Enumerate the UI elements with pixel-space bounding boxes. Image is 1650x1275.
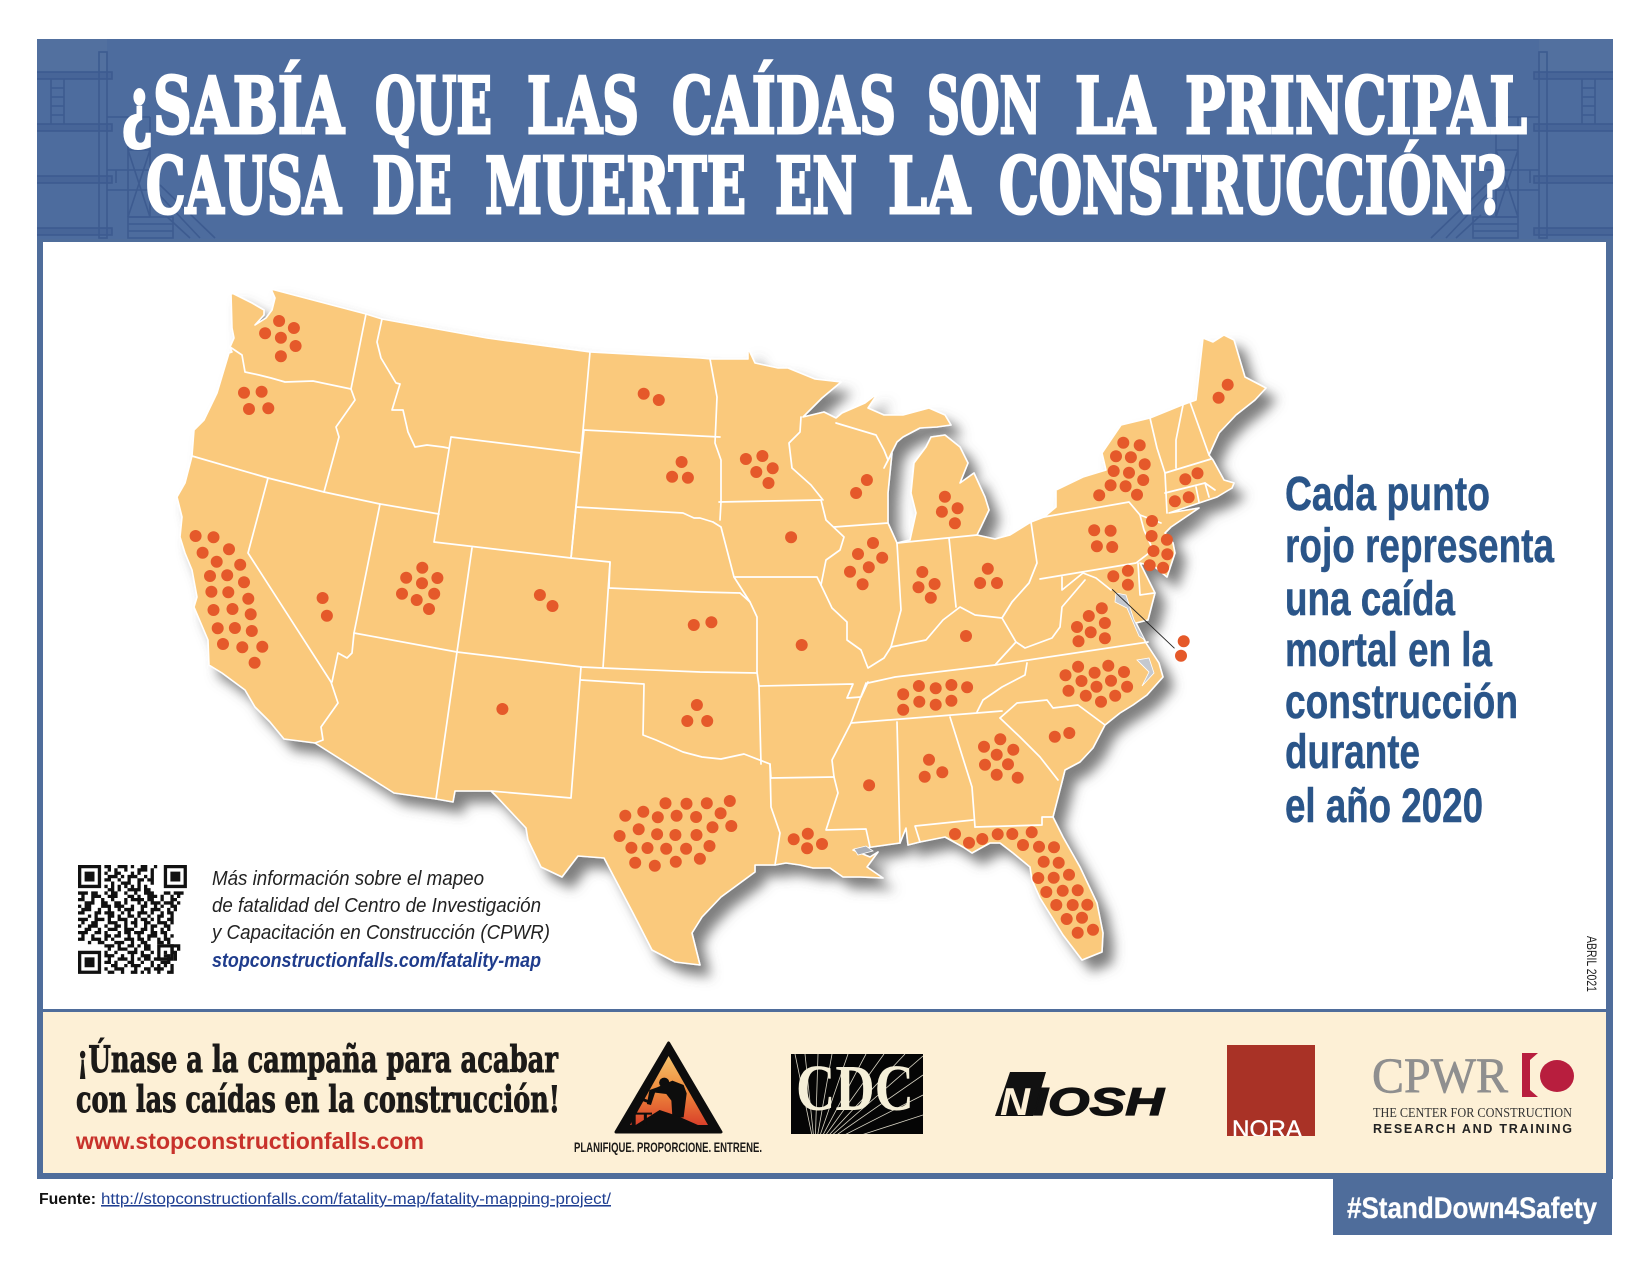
CPWR logo: CPWR — [1372, 1047, 1509, 1103]
map caption: rojo representa — [1285, 520, 1554, 573]
hashtag badge — [1333, 1179, 1612, 1235]
Connecticut dots — [1169, 491, 1195, 507]
more information text: stopconstructionfalls.com/fatality-map — [212, 950, 541, 972]
Washington dots — [259, 315, 302, 362]
campaign heading: ¡Únase a la campaña para acabar — [77, 1039, 559, 1081]
NIOSH logo: IOSH — [1033, 1081, 1165, 1124]
New Jersey dots — [1144, 515, 1173, 574]
map caption: el año 2020 — [1285, 780, 1483, 833]
Georgia dots — [978, 733, 1024, 784]
CPWR logo: THE CENTER FOR CONSTRUCTION — [1373, 1106, 1572, 1121]
title: DE — [372, 141, 452, 232]
logo slogan: PLANIFIQUE. PROPORCIONE. ENTRENE. — [574, 1139, 762, 1155]
Washington DC dots — [1175, 635, 1190, 662]
Washington DC leader line — [1112, 589, 1174, 648]
California dots — [190, 530, 268, 669]
Texas dots — [614, 795, 737, 872]
title: CAÍDAS — [672, 60, 896, 152]
Kansas dots — [688, 616, 717, 631]
more information text: y Capacitación en Construcción (CPWR) — [210, 922, 550, 944]
North Carolina dots — [1060, 660, 1133, 708]
Indiana dots — [912, 566, 941, 604]
title: SON — [927, 61, 1041, 152]
map caption: Cada punto — [1285, 468, 1490, 521]
call to action panel — [75, 1039, 1574, 1155]
map of the United States — [177, 289, 1266, 965]
title: CAUSA — [146, 141, 342, 232]
title: LA — [888, 141, 971, 232]
title — [122, 60, 1527, 232]
campaign heading — [76, 1039, 560, 1121]
title: ¿SABÍA — [122, 60, 345, 152]
Ohio dots — [974, 563, 1003, 589]
scaffold illustration right — [1431, 52, 1616, 238]
date label: ABRIL 2021 — [1584, 936, 1600, 992]
Virginia dots — [1071, 602, 1111, 647]
NIOSH logo: N — [1000, 1081, 1031, 1124]
Tennessee dots — [897, 679, 973, 716]
scaffold illustration left — [30, 52, 215, 238]
CPWR logo: RESEARCH AND TRAINING — [1373, 1122, 1572, 1136]
Mississippi dot — [863, 779, 875, 791]
North Dakota dots — [638, 388, 665, 406]
campaign heading: con las caídas en la construcción! — [76, 1079, 560, 1121]
Illinois dots — [844, 537, 888, 590]
more information text — [210, 868, 550, 972]
header banner — [30, 39, 1616, 239]
map caption: construcción — [1285, 676, 1518, 729]
source line: Fuente: — [39, 1191, 96, 1208]
title: LAS — [527, 61, 639, 152]
map caption: una caída — [1285, 573, 1455, 626]
map caption: durante — [1285, 726, 1420, 779]
NORA logo — [1227, 1045, 1315, 1143]
Kentucky dot — [960, 630, 972, 642]
title: MUERTE — [485, 141, 746, 232]
Louisiana dots — [788, 828, 828, 854]
New Mexico dot — [496, 703, 508, 715]
body frame — [37, 239, 1613, 1179]
worker silhouette — [629, 1078, 698, 1125]
South Carolina dots — [1049, 727, 1075, 743]
source line: http://stopconstructionfalls.com/fatality-map/fatality-mapping-project/ — [101, 1191, 612, 1208]
Utah dots — [396, 562, 443, 615]
QR code — [78, 865, 187, 974]
Missouri dot — [796, 639, 808, 651]
hashtag badge: #StandDown4Safety — [1347, 1192, 1597, 1225]
Maine dots — [1213, 379, 1234, 404]
Colorado dots — [534, 589, 558, 612]
Massachusetts dots — [1179, 467, 1204, 485]
CDC logo: CDC — [796, 1052, 914, 1125]
title: QUE — [375, 61, 492, 152]
map caption — [1285, 468, 1554, 833]
Wisconsin dots — [850, 474, 873, 499]
Nevada dots — [317, 592, 333, 622]
land outline — [177, 289, 1266, 965]
title: LA — [1075, 61, 1156, 152]
campaign URL: www.stopconstructionfalls.com — [75, 1128, 424, 1154]
bays and sounds — [854, 593, 1154, 855]
Maryland dots — [1107, 565, 1134, 591]
Oklahoma dots — [681, 699, 713, 727]
CPWR logo — [1372, 1047, 1574, 1136]
title: EN — [775, 141, 857, 232]
Michigan dots — [936, 491, 964, 529]
Pennsylvania dots — [1088, 524, 1118, 553]
more information text: de fatalidad del Centro de Investigación — [212, 895, 541, 917]
New York dots — [1093, 437, 1151, 501]
NIOSH logo — [995, 1072, 1165, 1124]
fatality dots — [190, 315, 1234, 939]
map caption: mortal en la — [1285, 624, 1492, 677]
more information text: Más información sobre el mapeo — [212, 868, 484, 890]
Florida dots — [949, 826, 1099, 939]
Alabama dots — [919, 754, 948, 783]
Minnesota dots — [740, 450, 779, 489]
campaign triangle logo — [574, 1043, 762, 1155]
South Dakota dots — [666, 456, 694, 484]
NORA logo: NORA — [1232, 1116, 1302, 1143]
Iowa dot — [785, 531, 797, 543]
Oregon dots — [238, 386, 274, 415]
state borders — [192, 314, 1215, 865]
